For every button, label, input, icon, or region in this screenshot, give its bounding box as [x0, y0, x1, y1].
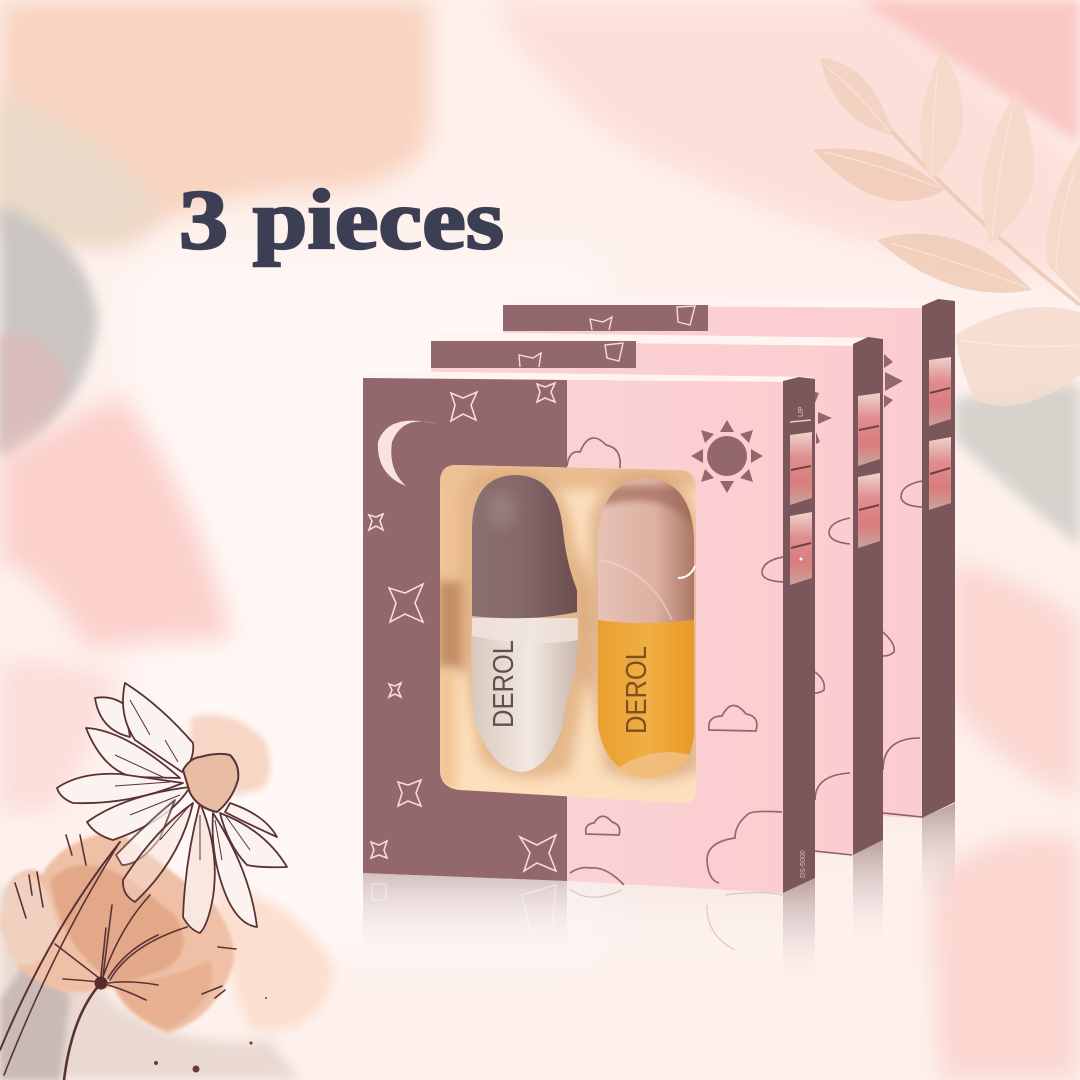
peach watercolor flower [0, 830, 234, 1033]
flower center dot [94, 976, 108, 990]
daisy veins [115, 700, 250, 860]
illustration: flowers [0, 683, 287, 1080]
flower stems and veins [0, 835, 236, 1080]
icon: crescent moon [378, 421, 437, 486]
box front right panel [567, 380, 783, 893]
bottle: clear: DEROL [488, 640, 520, 728]
box side panel: LIP [798, 406, 805, 417]
window tray [436, 460, 700, 810]
icons: stars [369, 383, 556, 871]
product box: front [363, 371, 832, 893]
box front left panel [363, 378, 567, 881]
icon: leaf branch [813, 50, 1080, 406]
icons: peeking sun rays [815, 392, 832, 444]
box side panel: DS-5000 [800, 850, 807, 878]
splatter dots [154, 997, 267, 1072]
bottle: clear [471, 475, 578, 772]
bottle: orange [598, 478, 695, 778]
box side panel [783, 377, 815, 893]
product box: back [503, 296, 955, 818]
daisy center [183, 754, 238, 812]
icons: clouds [567, 438, 783, 885]
product box: middle [431, 332, 903, 855]
icon: sun [691, 420, 763, 493]
heading: 3 pieces: 3 pieces [179, 173, 504, 267]
box top edge [363, 371, 815, 382]
bottle: orange: DEROL [621, 646, 653, 734]
daisy petals [57, 683, 287, 933]
reflections of boxes [363, 803, 955, 995]
